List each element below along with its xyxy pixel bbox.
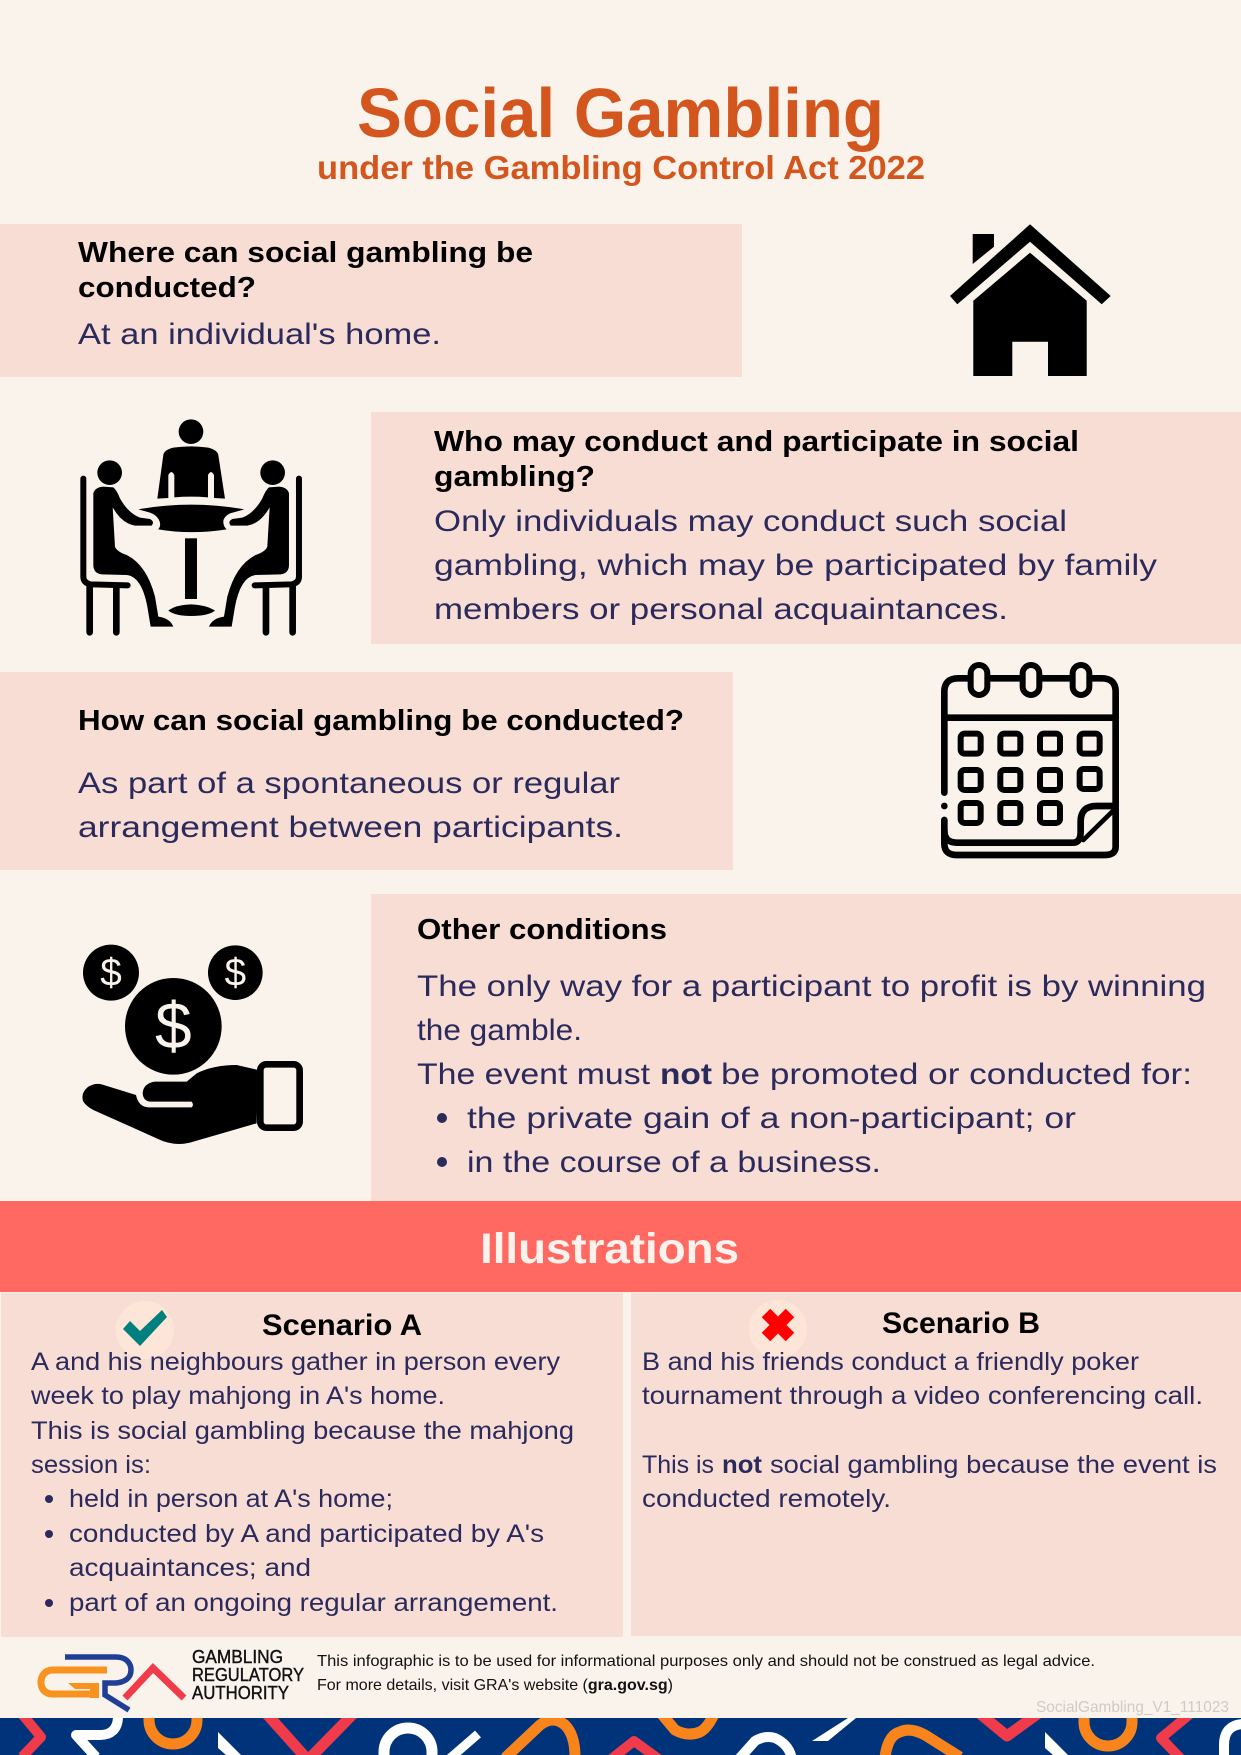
panel: scenario A: [1, 1293, 623, 1637]
text: disclaimer: For more details, visit GRA's website (gra.gov.sg): [317, 1677, 673, 1694]
footer pattern band: [0, 1718, 1241, 1755]
heading: other conditions: Other conditions: [417, 914, 667, 946]
panel: scenario B: tournament through a video conferencing call.: [642, 1382, 1203, 1410]
bullet list: scenario A: part of an ongoing regular arrangement.: [69, 1589, 558, 1617]
text: disclaimer: This infographic is to be used for informational purposes only and should not be construed as legal advice.: [317, 1653, 1095, 1670]
panel: who: gambling?: [434, 461, 595, 493]
panel: other conditions: be promoted or conducted for:: [721, 1058, 1192, 1091]
heading: where: Where can social gambling be: [78, 237, 533, 269]
panel: scenario B: This is: [642, 1451, 714, 1479]
logo wordmark: GAMBLING: [192, 1647, 283, 1667]
panel: who: members or personal acquaintances.: [434, 593, 1008, 626]
panel: scenario B: social gambling because the event is: [770, 1451, 1217, 1479]
bullet list: scenario A: [45, 1485, 558, 1617]
title: Social Gambling: [357, 74, 884, 152]
panel: scenario B: conducted remotely.: [642, 1485, 891, 1513]
panel: scenario A: week to play mahjong in A's home.: [30, 1382, 445, 1410]
heading: scenario B: Scenario B: [882, 1307, 1040, 1340]
icon: calendar: [941, 665, 1116, 855]
bullet list: conditions: the private gain of a non-participant; or: [467, 1102, 1076, 1135]
logo wordmark: AUTHORITY: [192, 1683, 289, 1703]
text: version tag: SocialGambling_V1_111023: [1036, 1699, 1229, 1716]
logo wordmark: REGULATORY: [192, 1665, 304, 1685]
bullet list: conditions: [437, 1102, 1076, 1179]
icon: coins over a hand: [82, 945, 300, 1144]
icon: coins over a hand: $: [155, 989, 192, 1063]
bullet list: conditions: in the course of a business.: [467, 1146, 881, 1179]
icon: people around a table: [83, 419, 299, 632]
text: conditions: The only way for a participant to profit is by winning: [417, 970, 1206, 1003]
subtitle: under the Gambling Control Act 2022: [317, 149, 925, 186]
text: who answer: Only individuals may conduct such social: [434, 505, 1067, 538]
heading: how: How can social gambling be conducted?: [78, 705, 684, 737]
icon: house: [950, 224, 1111, 376]
logo wordmark: [192, 1647, 304, 1703]
text: scenario B: B and his friends conduct a friendly poker: [642, 1348, 1139, 1376]
bullet list: scenario A: conducted by A and participated by A's: [69, 1520, 544, 1548]
text: how answer: As part of a spontaneous or regular: [78, 767, 620, 800]
icon: coins over a hand: $: [225, 952, 246, 995]
panel: scenario A: This is social gambling because the mahjong: [31, 1417, 574, 1445]
title: [317, 74, 925, 186]
heading: who: Who may conduct and participate in social: [434, 426, 1079, 458]
icon: cross mark: [749, 1300, 807, 1358]
banner: illustrations: [0, 1201, 1241, 1292]
panel: where: conducted?: [78, 272, 256, 304]
panel: who: [371, 412, 1241, 644]
panel: where: [0, 224, 742, 377]
panel: scenario B: [631, 1293, 1241, 1636]
panel: other conditions: [371, 894, 1241, 1201]
text: where answer: At an individual's home.: [78, 318, 441, 351]
banner: illustrations: Illustrations: [480, 1225, 739, 1273]
logo: GRA: [41, 1647, 304, 1710]
panel: other conditions: not: [660, 1058, 712, 1091]
heading: scenario A: Scenario A: [262, 1309, 422, 1342]
panel: other conditions: the gamble.: [417, 1014, 582, 1047]
panel: scenario A: session is:: [31, 1451, 151, 1479]
text: disclaimer: [317, 1653, 1095, 1694]
text: scenario A: A and his neighbours gather in person every: [31, 1348, 561, 1376]
panel: other conditions: The event must: [417, 1058, 651, 1091]
panel: scenario B: not: [722, 1451, 763, 1479]
icon: coins over a hand: $: [100, 952, 122, 995]
icon: check mark: [116, 1301, 174, 1359]
bullet list: scenario A: acquaintances; and: [69, 1554, 311, 1582]
panel: how: [0, 672, 733, 870]
bullet list: scenario A: held in person at A's home;: [69, 1485, 393, 1513]
panel: who: gambling, which may be participated by family: [434, 549, 1157, 582]
panel: how: arrangement between participants.: [78, 811, 623, 844]
